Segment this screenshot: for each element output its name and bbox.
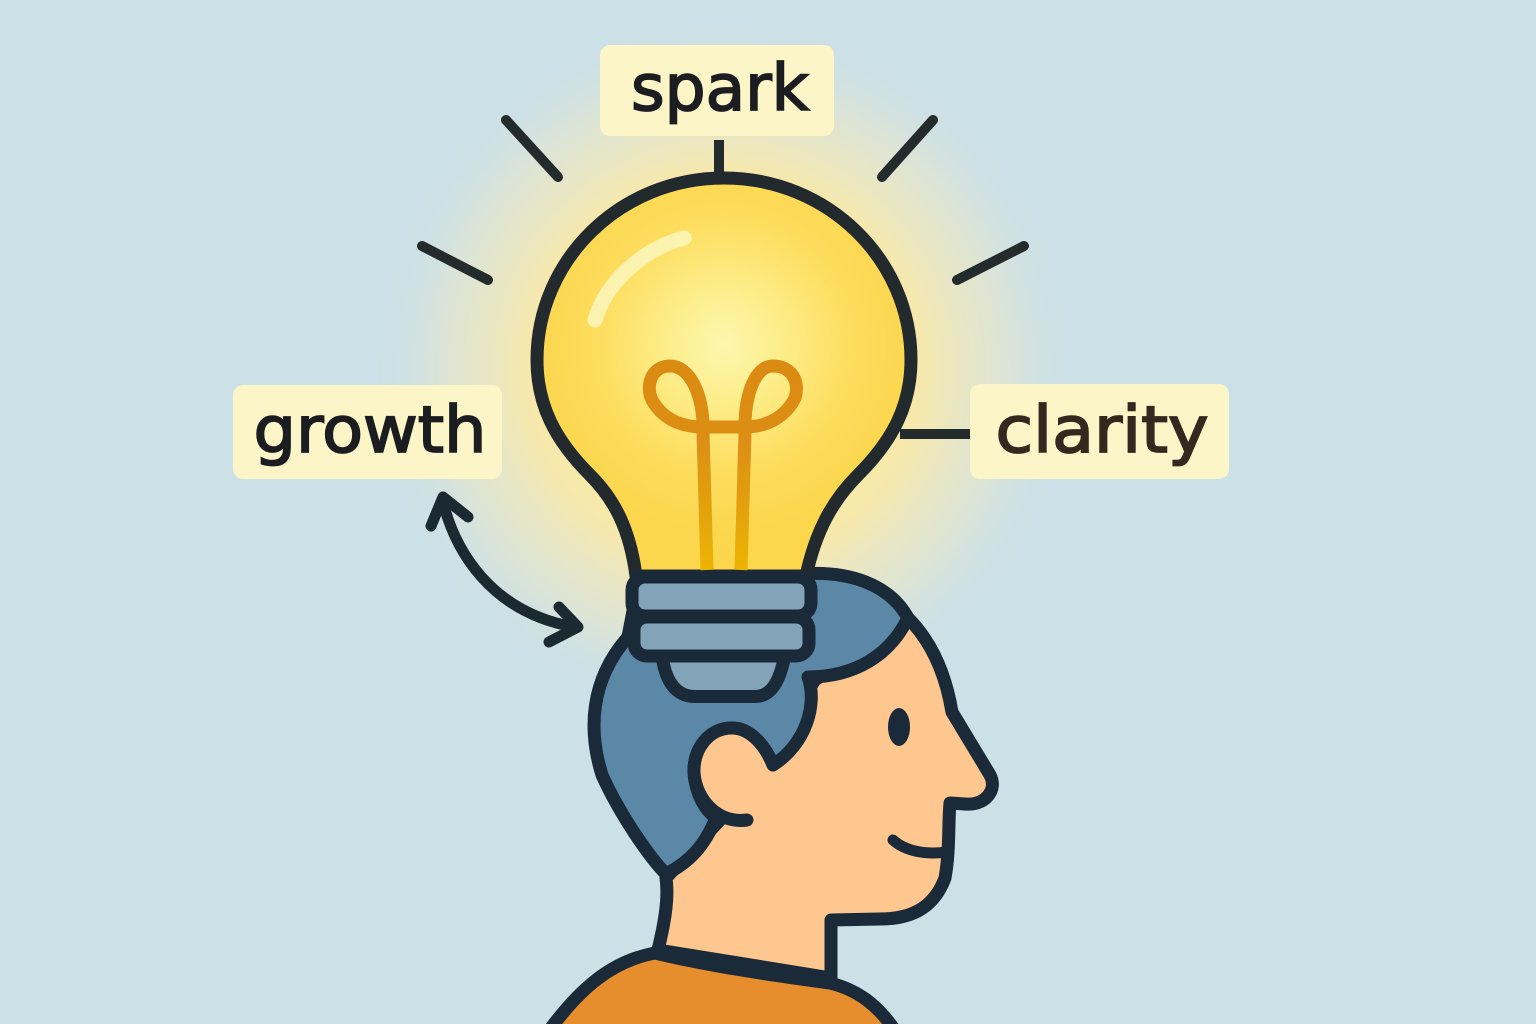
- head and neck: [658, 618, 992, 978]
- hair: [594, 573, 908, 874]
- arrow: growth to head: [431, 497, 578, 642]
- background glow: [369, 15, 1079, 725]
- shirt: [548, 953, 896, 1024]
- filament: [649, 366, 796, 570]
- eye: [888, 708, 910, 746]
- person: [548, 573, 992, 1024]
- screw base upper: [632, 577, 811, 616]
- highlight: [595, 238, 684, 320]
- light bulb: [537, 178, 911, 696]
- screw base lower: [634, 617, 809, 656]
- label: spark: spark: [631, 52, 809, 126]
- ear: [694, 728, 773, 820]
- label: clarity: [970, 384, 1229, 479]
- label: growth: growth: [254, 394, 486, 468]
- glass: [537, 178, 911, 576]
- label: spark: [600, 45, 834, 136]
- rays: [422, 120, 1024, 434]
- smile: [893, 840, 947, 853]
- label: growth: [233, 385, 502, 479]
- screw tip: [662, 655, 785, 696]
- label: clarity: clarity: [996, 394, 1208, 468]
